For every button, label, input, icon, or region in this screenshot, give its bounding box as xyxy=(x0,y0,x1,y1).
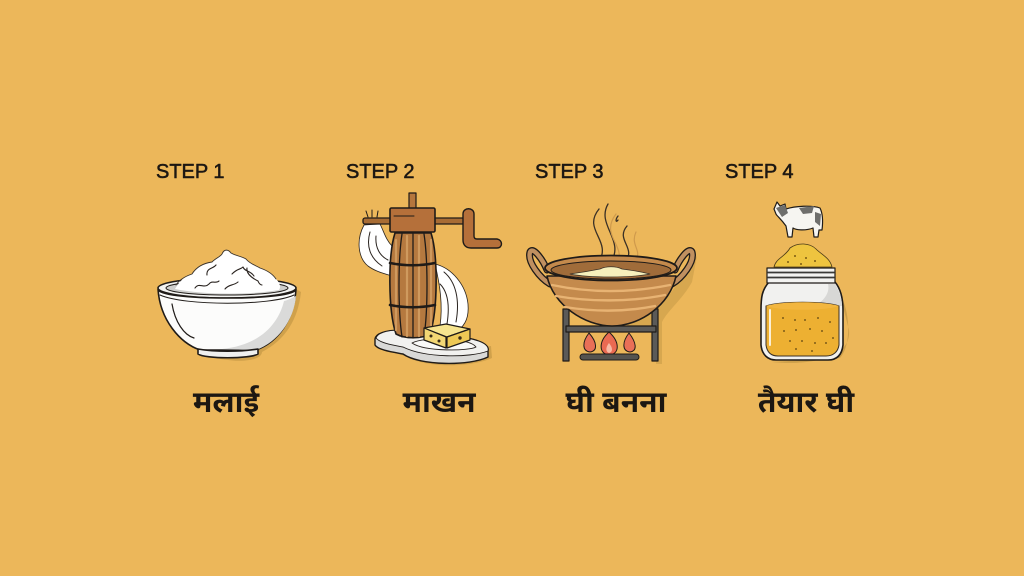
flames xyxy=(584,333,596,352)
axle and crank xyxy=(363,218,469,224)
icon: jar of ghee xyxy=(761,244,849,363)
steam xyxy=(594,204,629,262)
icon: bowl of cream xyxy=(158,250,301,361)
panel: step 2 butter xyxy=(346,161,502,419)
heading: step 3: STEP 3 xyxy=(535,161,604,183)
butter block xyxy=(424,324,470,337)
cream heap xyxy=(175,250,280,294)
panel: step 1 cream xyxy=(156,161,301,419)
label: malai: मलाई xyxy=(193,385,260,419)
panel: step 3 making ghee xyxy=(530,161,697,419)
ghee in pot xyxy=(570,267,650,277)
heading: step 2: STEP 2 xyxy=(346,161,415,183)
icon: wooden churn xyxy=(359,193,502,365)
glass xyxy=(761,282,843,360)
stand xyxy=(563,309,658,361)
label: makhan: माखन xyxy=(402,386,476,419)
panel: step 4 ready ghee xyxy=(725,161,855,419)
barrel xyxy=(390,233,436,338)
icon: kadai on fire xyxy=(530,204,697,364)
label: taiyar ghee: तैयार घी xyxy=(758,384,855,419)
milk ribbons xyxy=(359,224,392,276)
label: ghee banana: घी बनना xyxy=(566,385,668,419)
heading: step 1: STEP 1 xyxy=(156,161,225,183)
ghee fill xyxy=(766,302,839,356)
bowl body xyxy=(158,289,296,350)
heading: step 4: STEP 4 xyxy=(725,161,794,183)
pot body xyxy=(547,276,676,326)
icon: cow xyxy=(774,202,823,237)
handles xyxy=(530,251,550,284)
bowl rim back xyxy=(158,278,296,298)
base plate xyxy=(375,330,488,363)
heap xyxy=(774,244,832,267)
